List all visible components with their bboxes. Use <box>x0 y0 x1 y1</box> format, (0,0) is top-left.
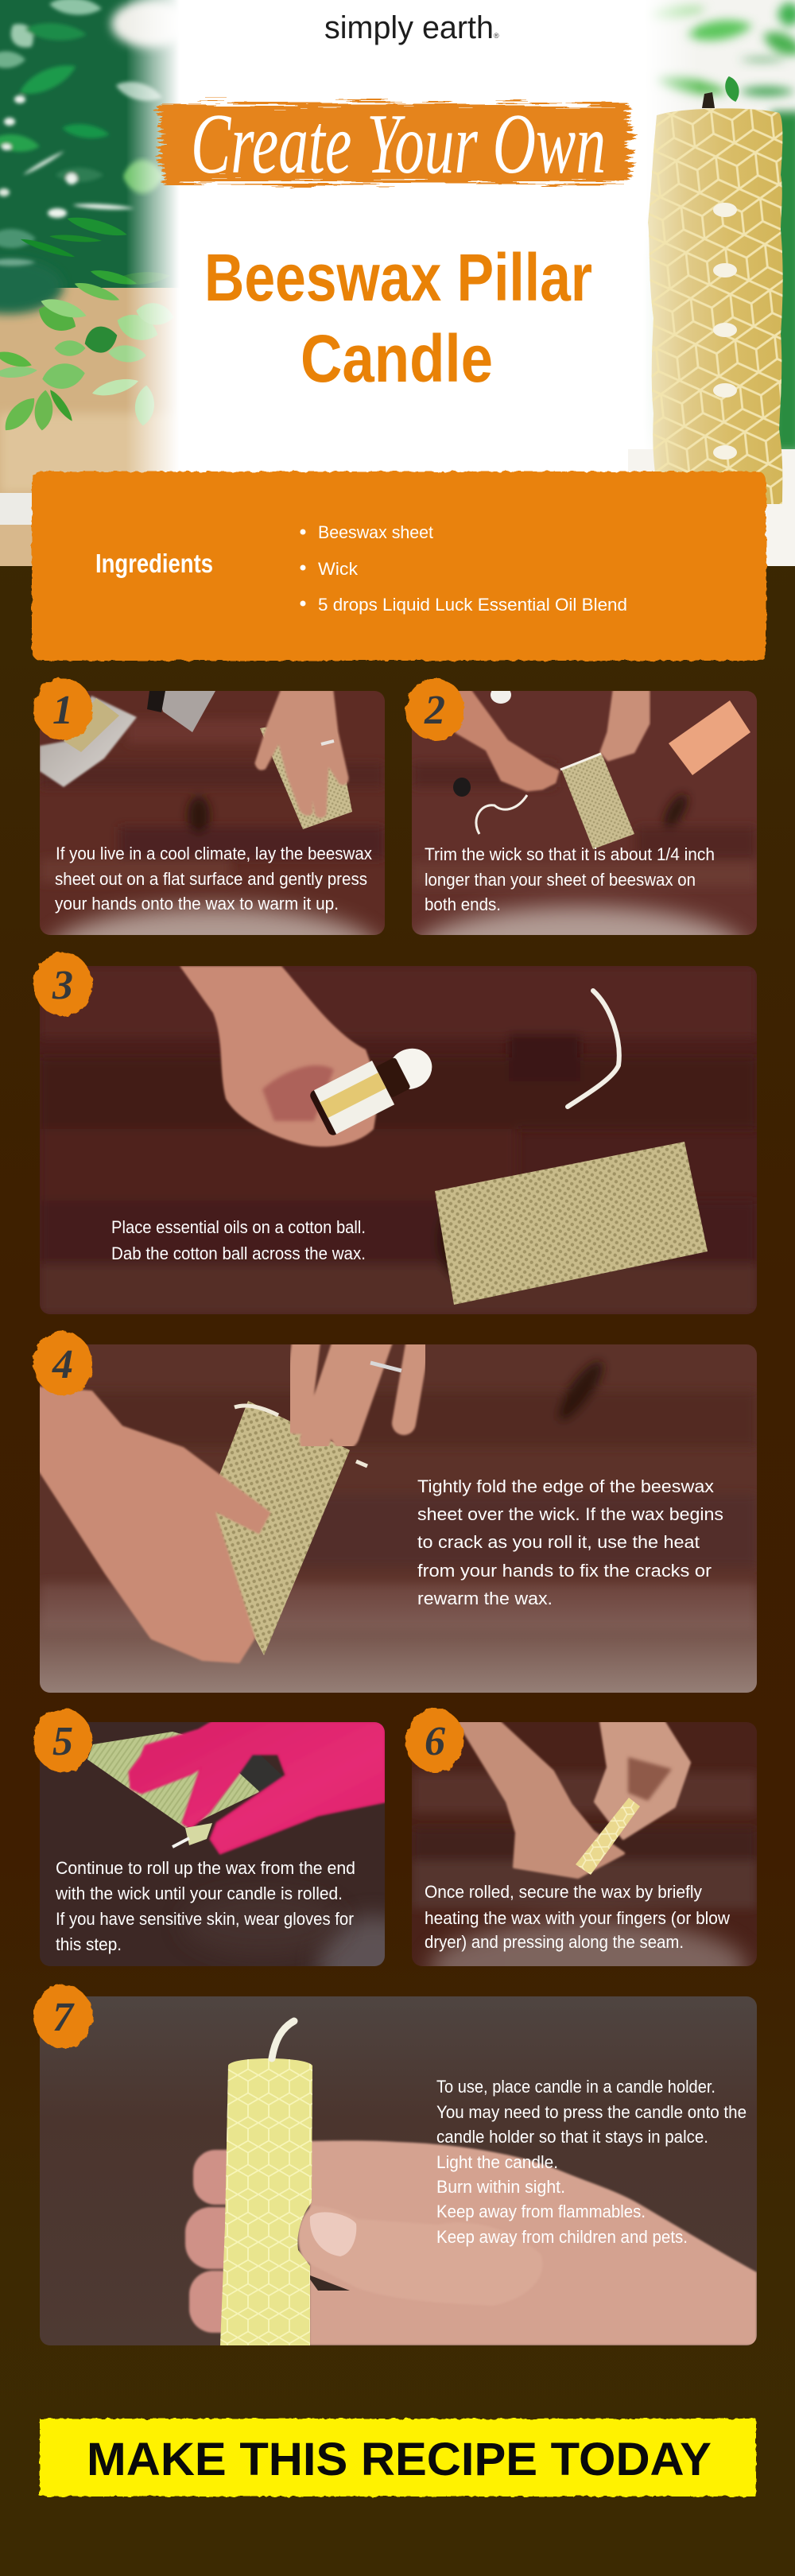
step 6 text: heating the wax with your fingers (or blow <box>425 1908 730 1928</box>
step 4 text: Tightly fold the edge of the beeswax <box>417 1476 714 1496</box>
step 1 text <box>55 844 372 914</box>
hero photo: green leaves on the left <box>0 0 177 566</box>
step 2 text: Trim the wick so that it is about 1/4 inch <box>425 844 715 864</box>
step 4 badge: 4 <box>52 1342 73 1387</box>
left hand <box>459 1722 623 1877</box>
step 7 text: Burn within sight. <box>436 2177 565 2197</box>
step 3 text <box>111 1217 366 1263</box>
panel: ingredients <box>32 471 766 661</box>
step 7 text: candle holder so that it stays in palce. <box>436 2127 708 2147</box>
bottle cap <box>453 778 471 797</box>
step 5 text: Continue to roll up the wax from the end <box>56 1858 355 1878</box>
step 1 text: sheet out on a flat surface and gently press <box>55 869 367 889</box>
wick <box>235 1406 367 1466</box>
panel: step 2 <box>405 677 757 935</box>
panel: step 1 <box>33 677 385 935</box>
panel: step 5 <box>33 1708 385 1966</box>
logo: simply earth <box>324 10 494 45</box>
beeswax sheet <box>215 1401 350 1655</box>
fingers behind candle <box>185 2150 249 2333</box>
cotton ball <box>491 691 511 704</box>
step 4 text: to crack as you roll it, use the heat <box>417 1532 700 1552</box>
instruction card <box>669 700 750 775</box>
step 3 badge <box>33 952 92 1016</box>
step 7 text <box>436 2077 747 2247</box>
step 1 badge <box>33 678 92 740</box>
wick <box>476 795 527 834</box>
step 5 text: with the wick until your candle is rolled. <box>55 1884 343 1903</box>
thumb gap <box>306 2274 350 2291</box>
step 2 photo <box>412 691 757 935</box>
step 2 text: longer than your sheet of beeswax on <box>425 870 696 890</box>
call to action banner <box>40 2419 756 2496</box>
step 1 text: If you live in a cool climate, lay the beeswax <box>56 844 372 863</box>
candle wick <box>702 92 715 108</box>
step 6 text <box>425 1882 730 1952</box>
beeswax sheet <box>260 727 352 829</box>
heading: Beeswax Pillar Candle: Beeswax Pillar <box>204 240 592 315</box>
wick <box>173 1838 189 1847</box>
step 5 photo <box>40 1722 385 1966</box>
step 6 photo <box>412 1722 757 2015</box>
wick <box>568 991 619 1107</box>
step 6 badge: 6 <box>425 1719 445 1764</box>
title banner: Create Your Own: Create Your Own <box>191 97 606 192</box>
white dish under the candle <box>628 449 795 462</box>
right hand <box>601 691 649 760</box>
rolled candle <box>576 1798 640 1875</box>
step 4 photo <box>40 1336 757 1693</box>
step 6 text: Once rolled, secure the wax by briefly <box>425 1882 702 1902</box>
hand holding bottle <box>180 966 380 1146</box>
ingredients list <box>301 522 627 615</box>
step 3 photo <box>40 966 757 1314</box>
step 5 text <box>55 1858 355 1954</box>
step 4 text: from your hands to fix the cracks or <box>417 1561 712 1581</box>
step 2 badge: 2 <box>424 688 445 733</box>
rolled wax <box>185 1823 212 1845</box>
right hand fingers <box>297 1336 419 1441</box>
left arm and hand <box>445 691 558 790</box>
plastic bag <box>40 696 137 787</box>
panel: step 7 <box>33 1984 757 2345</box>
hand <box>309 2140 757 2345</box>
ingredients list: 5 drops Liquid Luck Essential Oil Blend <box>318 595 627 615</box>
ring <box>321 741 334 744</box>
hand <box>256 691 347 817</box>
step 5 text: this step. <box>56 1934 122 1954</box>
ring <box>370 1363 401 1371</box>
hero honeycomb candle <box>648 92 783 504</box>
essential oil bottle <box>310 1048 432 1135</box>
panel: step 6 <box>405 1709 757 2015</box>
call to action banner: MAKE THIS RECIPE TODAY <box>87 2434 712 2485</box>
step 1 text: your hands onto the wax to warm it up. <box>55 894 339 914</box>
step 3 badge: 3 <box>52 963 73 1008</box>
step 1 photo <box>40 691 385 935</box>
step 5 badge: 5 <box>52 1719 73 1764</box>
ingredients list: Wick <box>318 559 359 579</box>
step 7 text: To use, place candle in a candle holder. <box>436 2077 716 2097</box>
step 4 text: sheet over the wick. If the wax begins <box>417 1504 723 1524</box>
step 3 text: Dab the cotton ball across the wax. <box>111 1243 366 1263</box>
step 4 badge <box>33 1332 92 1395</box>
step 5 badge <box>33 1709 92 1772</box>
left hand <box>40 1388 269 1662</box>
beeswax sheet <box>87 1732 259 1828</box>
brush stroke <box>161 103 630 183</box>
panel: step 4 <box>33 1332 757 1693</box>
step 7 text: Light the candle. <box>436 2152 558 2172</box>
thumb <box>298 2206 542 2306</box>
step 2 text <box>425 844 715 914</box>
wick <box>272 2021 294 2058</box>
step 6 badge <box>405 1709 464 1772</box>
step 7 text: Keep away from flammables. <box>436 2202 646 2221</box>
heading: Beeswax Pillar Candle: Candle <box>301 321 493 396</box>
step 7 text: Keep away from children and pets. <box>436 2227 688 2247</box>
step 1 badge: 1 <box>52 688 73 733</box>
step 2 badge <box>405 678 464 740</box>
step 4 text <box>417 1476 723 1608</box>
step 4 text: rewarm the wax. <box>417 1589 553 1608</box>
pink rubber glove <box>130 1722 385 1853</box>
panel: step 3 <box>33 952 757 1314</box>
step 7 photo <box>40 1996 757 2345</box>
step 6 text: dryer) and pressing along the seam. <box>425 1932 684 1952</box>
step 7 text: You may need to press the candle onto the <box>436 2102 747 2122</box>
step 2 text: both ends. <box>425 894 501 914</box>
step 7 badge: 7 <box>52 1995 75 2040</box>
heading: Beeswax Pillar Candle <box>204 240 592 396</box>
beeswax candle <box>220 2058 312 2345</box>
shadow in the glove <box>238 1755 282 1791</box>
beeswax sheet <box>435 1142 708 1305</box>
beeswax sheet <box>561 752 634 849</box>
step 3 text: Place essential oils on a cotton ball. <box>111 1217 366 1237</box>
logo: ® <box>494 32 499 40</box>
step 7 badge <box>33 1984 92 2048</box>
hero photo: blurred foliage on the right <box>628 0 795 566</box>
right hand <box>595 1722 689 1838</box>
ingredients heading: Ingredients <box>95 549 213 578</box>
ingredients list: Beeswax sheet <box>318 522 433 542</box>
oil bottle and wrapper <box>147 691 215 732</box>
step 5 text: If you have sensitive skin, wear gloves for <box>56 1909 354 1929</box>
